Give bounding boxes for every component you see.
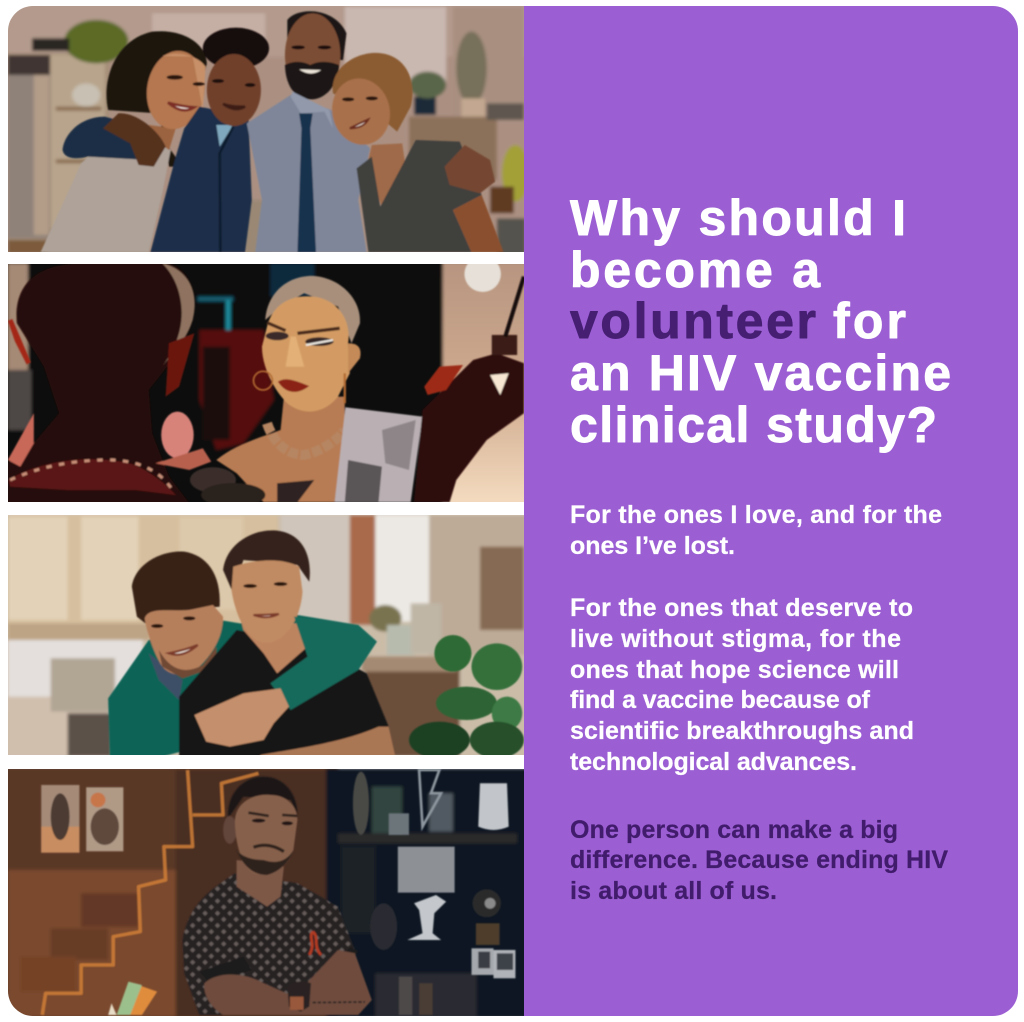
hand with brush: [414, 277, 524, 502]
crossed arms and watch: [204, 950, 372, 1015]
text block: living without stigma: For the ones that deserve to: [570, 594, 913, 622]
text block: living without stigma: technological advances.: [570, 748, 857, 776]
heading: Why should I: [570, 190, 906, 246]
stairs and shelf background: [0, 767, 529, 1020]
photo: man with red ribbon and crossed arms: [0, 767, 529, 1020]
heading: for: [833, 293, 906, 349]
patterned shirt and torso: [183, 860, 358, 1015]
text block: living without stigma: scientific breakthroughs and: [570, 717, 914, 745]
heading: volunteer: [570, 293, 816, 349]
text block: for the ones I love: [570, 501, 942, 560]
man in green hoodie: [108, 552, 377, 757]
red ribbon: [309, 932, 321, 955]
man with beard and tie: [247, 11, 370, 252]
text block: living without stigma: [570, 594, 914, 776]
head with beard and earring: [223, 777, 297, 875]
living room background: [0, 513, 527, 758]
boy in navy hoodie: [63, 28, 269, 252]
clasped hands: [194, 688, 289, 747]
heading: clinical study?: [570, 397, 937, 453]
bulb: [464, 264, 502, 293]
man in black shirt: [179, 530, 395, 757]
heading: an HIV vaccine: [570, 345, 951, 401]
panel: purple text panel: [524, 6, 1018, 1016]
text block: living without stigma: ones that hope science will: [570, 656, 899, 684]
text block: living without stigma: live without stigma, for the: [570, 625, 901, 653]
text block: for the ones I love: For the ones I love, and for the: [570, 501, 942, 529]
text block: call to action: [570, 816, 948, 905]
woman in grey top: [326, 53, 504, 252]
framed posters: [41, 785, 123, 853]
photo: family of four in kitchen: [0, 0, 529, 257]
makeup brushes: [190, 466, 314, 502]
back of head in mirror foreground: [8, 263, 211, 503]
shelf objects: [353, 770, 515, 1015]
heading: become a: [570, 242, 821, 298]
heading: [570, 190, 951, 453]
dressing room background: [0, 260, 527, 507]
text block: call to action: is about all of us.: [570, 877, 777, 905]
woman with curly hair: [41, 31, 210, 252]
text block: for the ones I love: ones I’ve lost.: [570, 532, 735, 560]
performer face and shoulders: [216, 276, 361, 502]
text block: call to action: difference. Because ending HIV: [570, 846, 948, 874]
glowing stair edges: [42, 770, 259, 1015]
kitchen background: [0, 0, 529, 257]
photo card: [335, 407, 422, 502]
photo: couple embracing: [0, 513, 527, 758]
green arm across shoulders: [270, 617, 377, 710]
books: [108, 982, 157, 1015]
text block: call to action: One person can make a big: [570, 816, 898, 844]
text block: living without stigma: find a vaccine because of: [570, 686, 871, 714]
photo: drag performer at mirror: [0, 256, 527, 507]
houseplant: [409, 635, 524, 758]
